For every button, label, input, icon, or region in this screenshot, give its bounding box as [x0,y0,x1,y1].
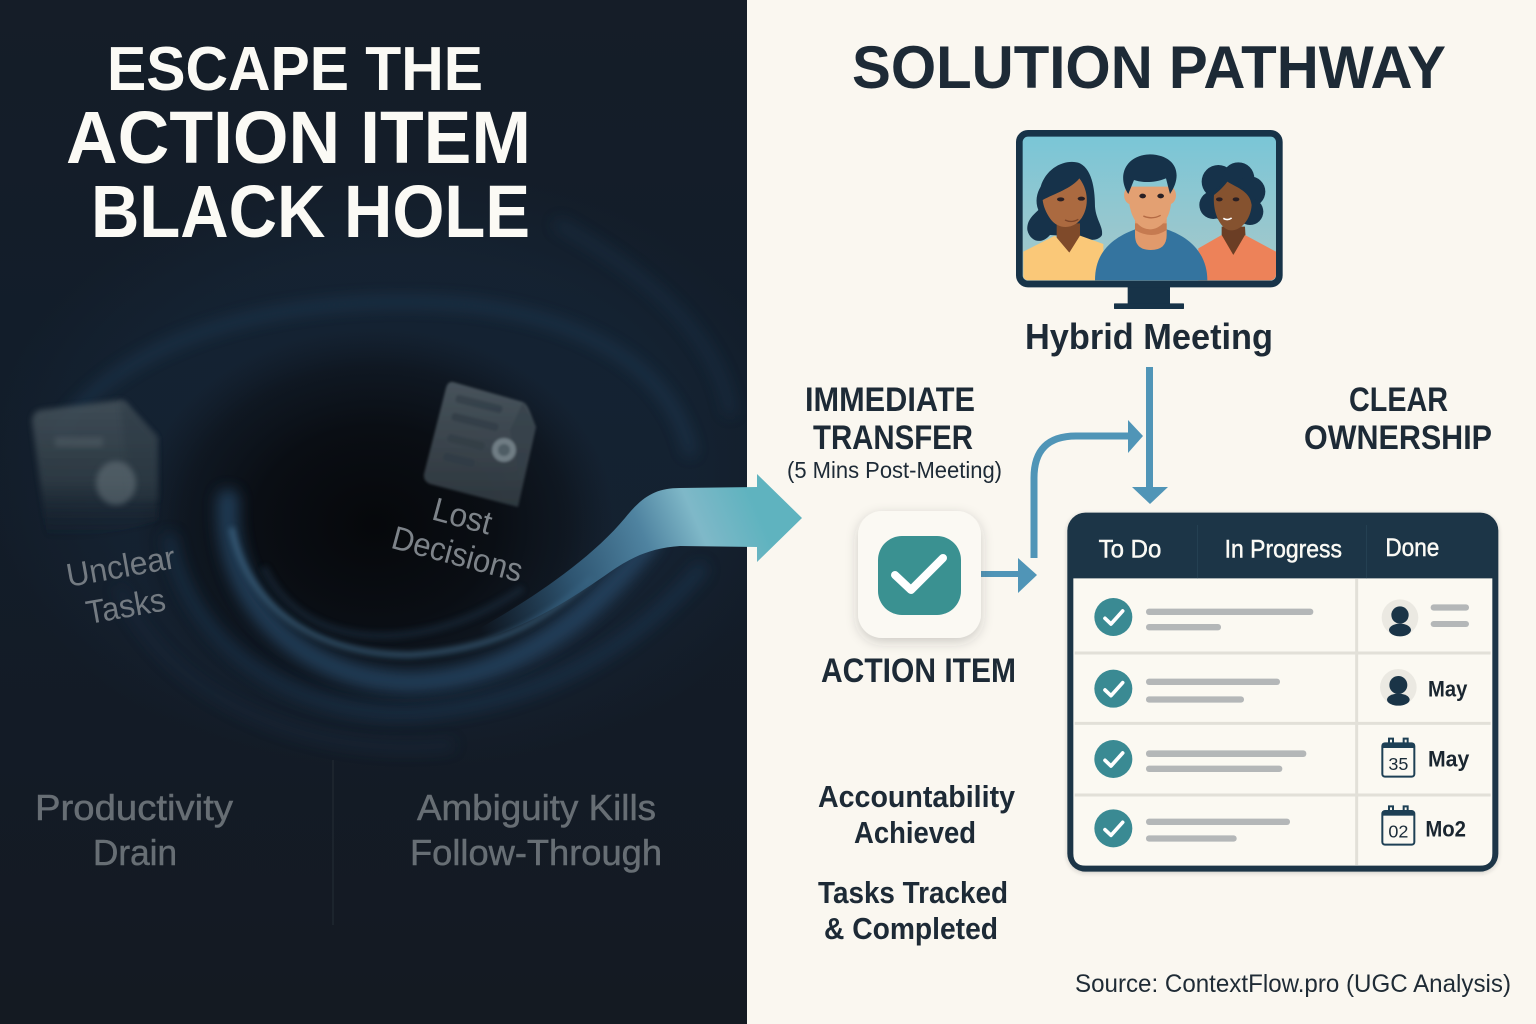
statement: ambiguity kills follow-through: Ambiguity Kills [417,787,656,828]
label: immediate transfer: TRANSFER [813,419,973,457]
arrow: meeting down to board [1132,367,1168,504]
heading: solution pathway: SOLUTION PATHWAY [852,34,1446,101]
owner avatars [1382,599,1418,636]
row placeholder lines [1146,604,1469,842]
board header: Done [1385,534,1439,562]
right participant [1199,162,1265,225]
statement: productivity drain [35,787,233,873]
arrow: curved path to ownership [1034,420,1143,558]
label: lost decisions: Decisions [388,519,527,589]
text: tasks tracked and completed: & Completed [824,911,998,946]
label: hybrid meeting: Hybrid Meeting [1025,316,1273,357]
label: immediate transfer [787,381,1002,483]
label: unclear tasks [63,538,185,633]
center participant [1095,229,1207,280]
due labels: May [1428,747,1470,772]
arrow: escape flow out of the black hole [480,474,802,640]
label: immediate transfer: IMMEDIATE [805,381,975,419]
due labels: May [1428,677,1468,702]
statement: ambiguity kills follow-through: Follow-Through [410,832,662,873]
panel: task board: 02 [1388,821,1408,841]
statement: productivity drain: Productivity [35,787,233,828]
faint divider between statements [332,760,334,925]
label: action item: ACTION ITEM [821,652,1016,690]
statement: productivity drain: Drain [93,832,177,873]
panel: solution pathway background [747,0,1536,1024]
label: clear ownership: CLEAR [1349,381,1448,419]
statement: ambiguity kills follow-through [410,787,662,873]
board header: In Progress [1225,535,1342,563]
label: unclear tasks: Unclear [63,538,178,594]
due labels [1425,677,1470,841]
label: immediate transfer: (5 Mins Post-Meeting) [787,457,1002,483]
label: unclear tasks: Tasks [83,581,168,631]
title: escape the action item black hole [66,35,531,253]
text: tasks tracked and completed: Tasks Tracked [818,875,1008,910]
icon: unclear tasks document [32,400,158,536]
text: accountability achieved [818,779,1016,850]
board header: To Do [1099,535,1161,563]
row checks [1094,598,1132,847]
title: escape the action item black hole: ACTION ITEM [66,96,531,179]
arrow: action item to next step [981,558,1037,593]
panel: black hole background [0,0,747,1024]
text: tasks tracked and completed [818,875,1008,946]
icon: monitor with hybrid meeting participants [1019,133,1279,309]
icon: action item card [858,511,981,638]
source note: Source: ContextFlow.pro (UGC Analysis) [1075,970,1511,998]
label: lost decisions [388,482,537,589]
panel: task board: 35 [1388,754,1408,774]
text: accountability achieved: Achieved [854,815,976,850]
label: lost decisions: Lost [429,490,496,541]
label: clear ownership: OWNERSHIP [1304,419,1492,457]
title: escape the action item black hole: BLACK HOLE [91,170,530,253]
label: clear ownership [1304,381,1492,457]
board header [1099,534,1439,563]
calendars [1382,743,1414,845]
icon: lost decisions document [424,382,536,507]
text: accountability achieved: Accountability [818,779,1016,814]
due labels: Mo2 [1425,816,1466,841]
title: escape the action item black hole: ESCAPE THE [107,35,483,104]
panel: task board [1067,513,1498,872]
left participant [1027,162,1102,241]
swirl arcs [60,225,730,747]
